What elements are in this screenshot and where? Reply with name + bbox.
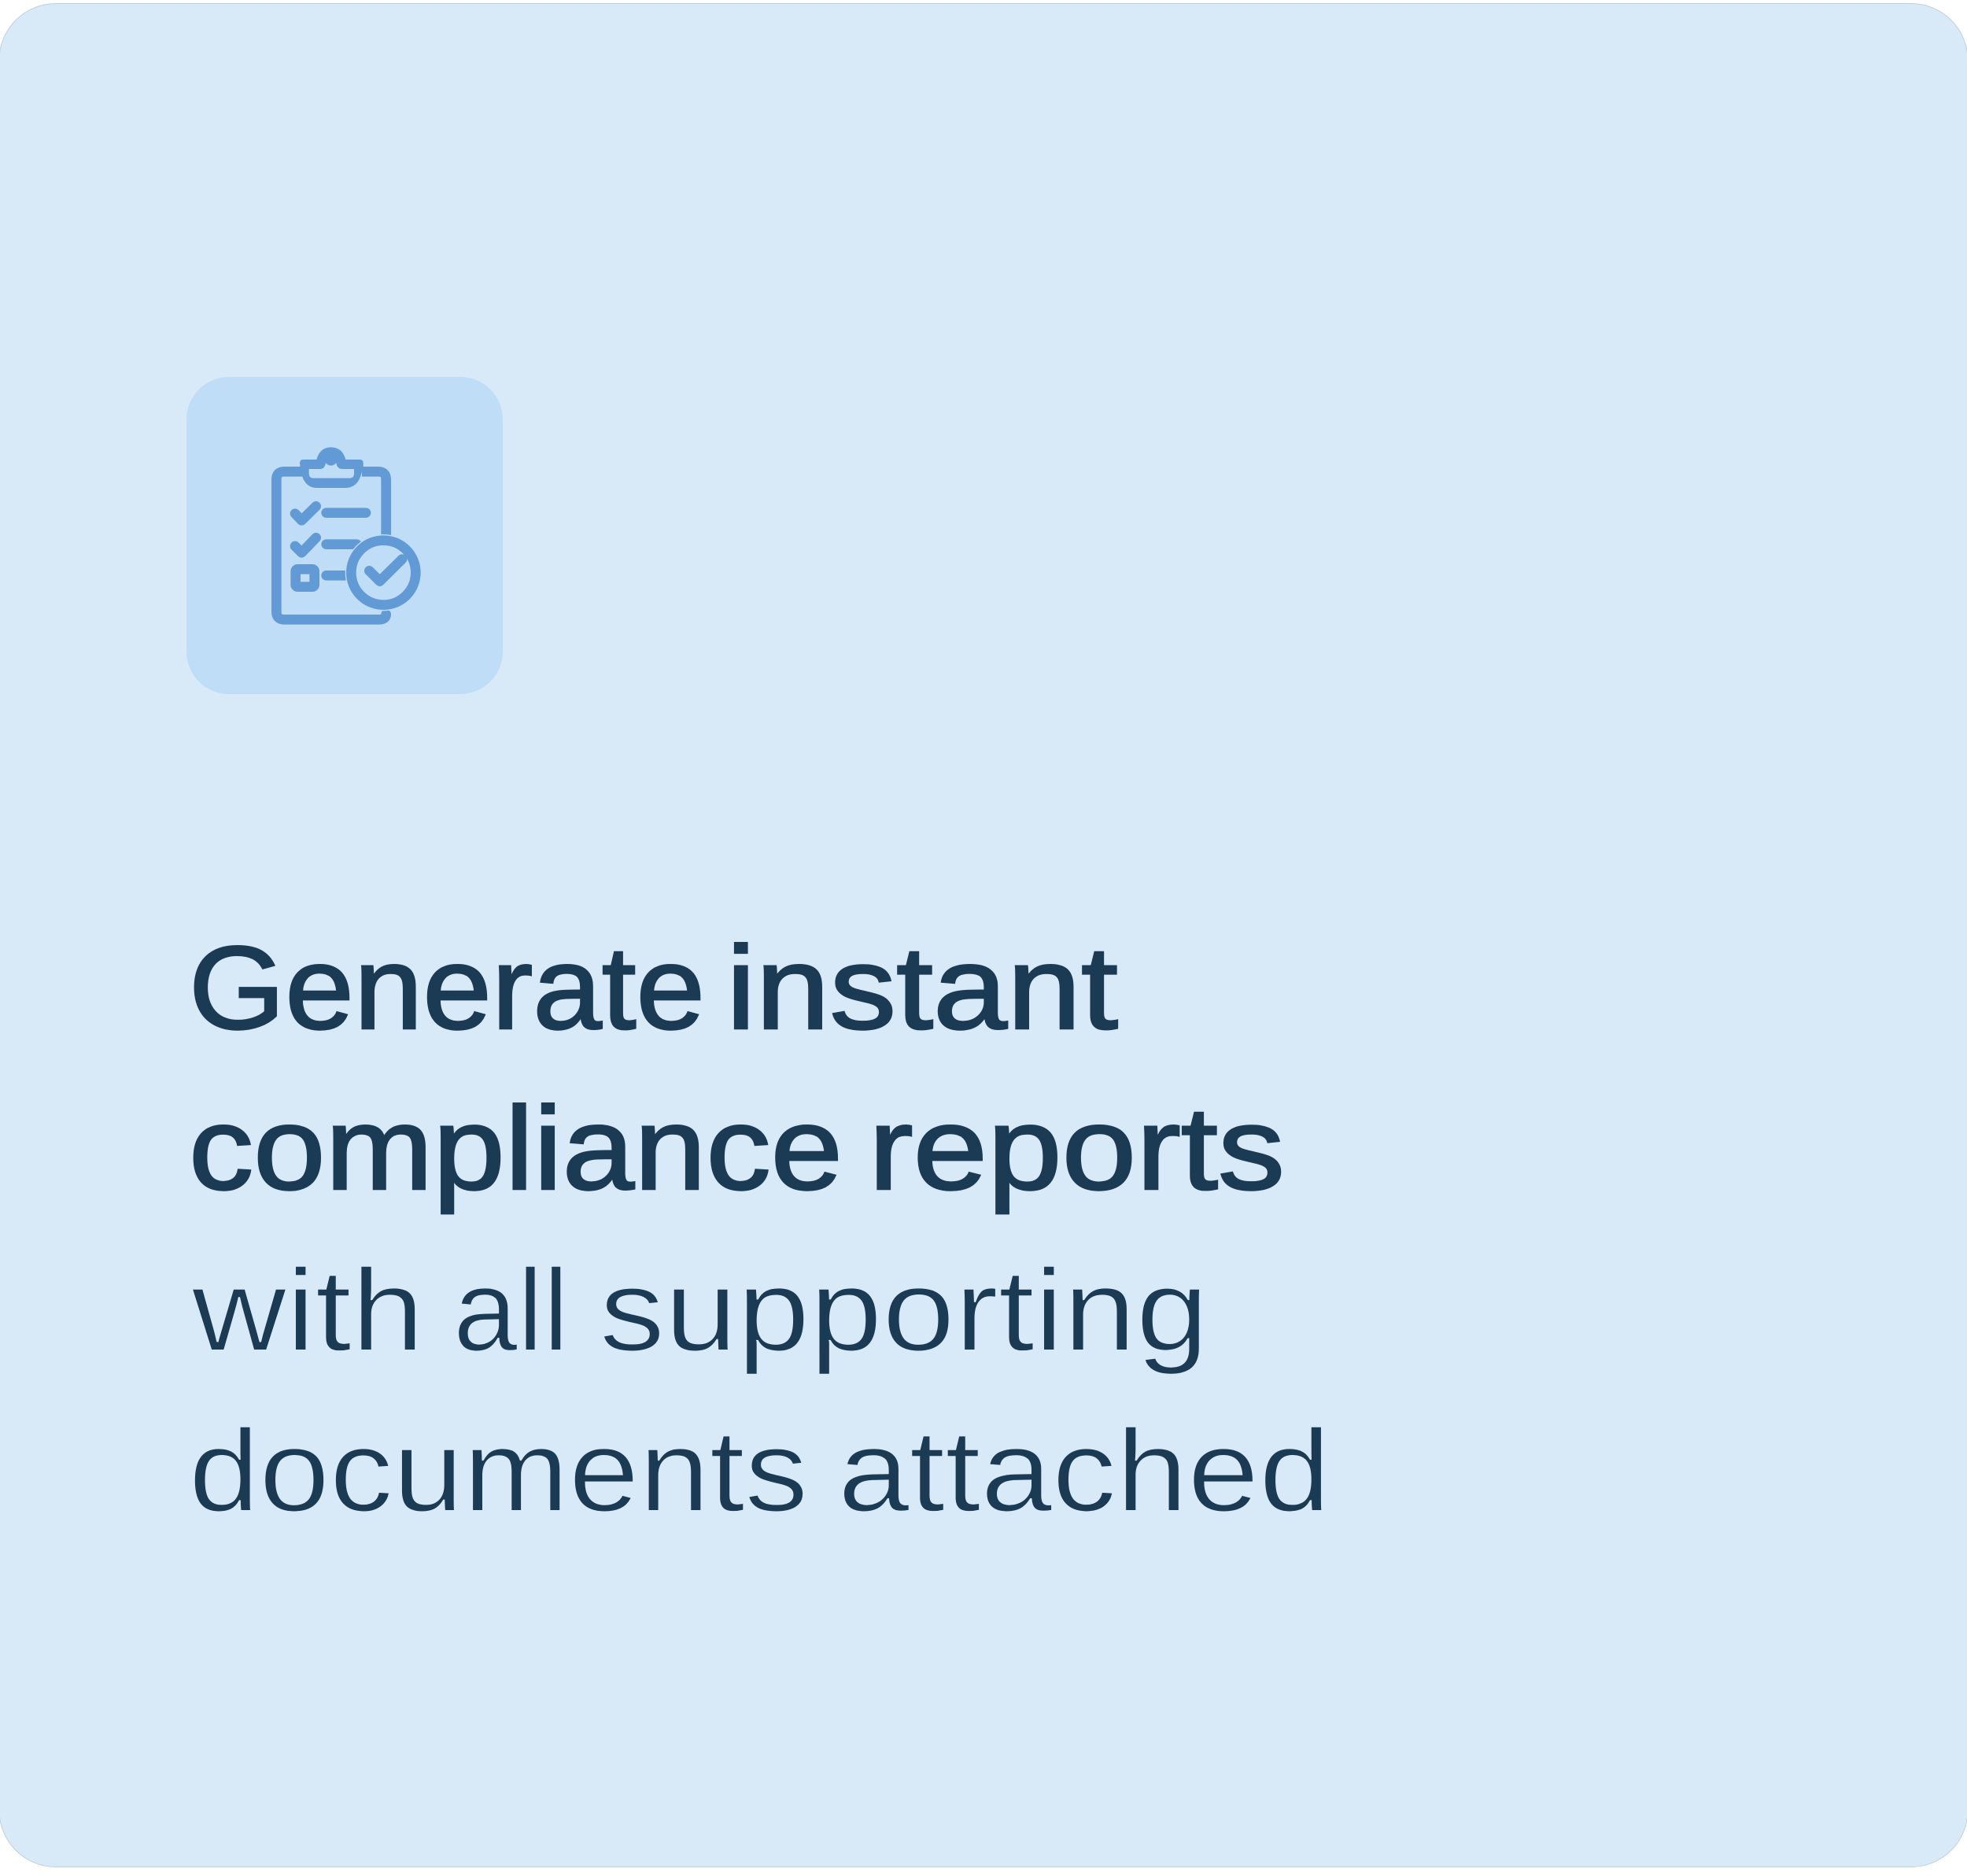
clipboard clip: [300, 447, 364, 488]
badge halo: [345, 534, 422, 611]
regular line 3: supporting: [600, 1246, 1209, 1376]
text block: heading and description: [189, 921, 1330, 1536]
check badge: [351, 541, 415, 605]
icon tile: [186, 377, 503, 694]
first checked item: [295, 506, 366, 520]
regular line 4: [189, 1406, 1330, 1536]
bold line 2: compliance: [189, 1082, 843, 1214]
clipboard right edge: [362, 471, 386, 535]
regular line 4: documents: [189, 1406, 808, 1536]
regular line 3: all: [453, 1246, 569, 1376]
second checked item: [295, 537, 356, 552]
bold line 1: instant: [726, 921, 1118, 1054]
bold line 2: reports: [869, 1082, 1285, 1214]
bold line 1: Generate: [189, 921, 705, 1054]
bold line 1: [189, 921, 1118, 1054]
clipboard body: [276, 471, 386, 619]
regular line 4: attached: [838, 1406, 1330, 1536]
regular line 3: [191, 1246, 1209, 1376]
unchecked item: [296, 569, 349, 587]
icon: clipboard checklist with check badge: [276, 447, 422, 619]
bold line 2: [189, 1082, 1285, 1214]
regular line 3: with: [191, 1246, 424, 1376]
